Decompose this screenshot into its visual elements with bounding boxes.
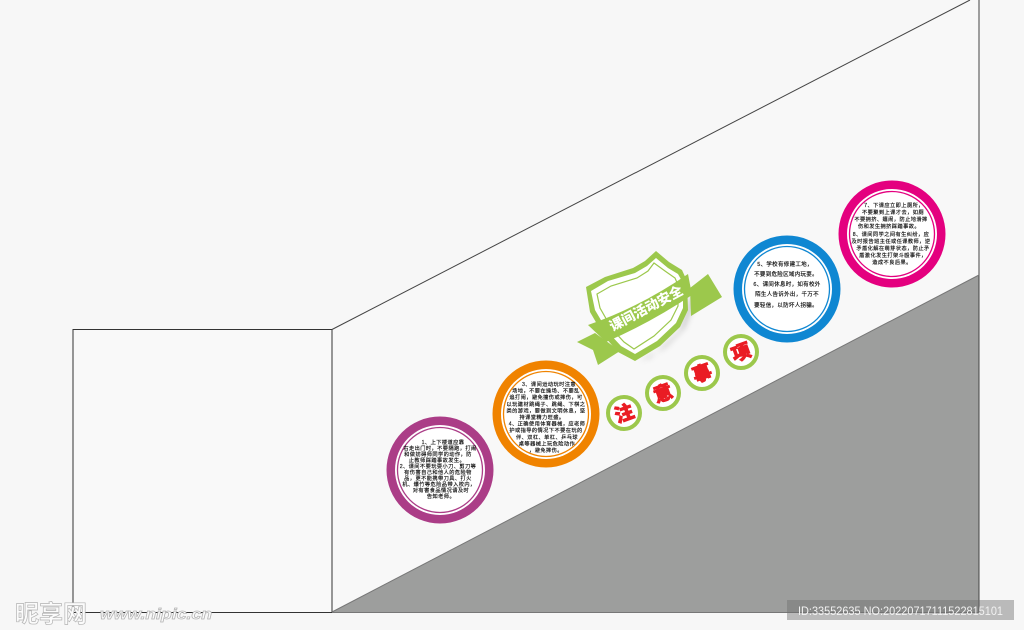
shield outer — [586, 251, 688, 361]
circle: orange notice: ，避免摔伤。 — [529, 446, 563, 454]
circle: pink notice: 伤和发生拥挤踩踏事故。 — [858, 222, 920, 230]
circle: blue notice: 不要到危险区域内玩耍。 — [754, 270, 818, 278]
circle: 项: 项 — [729, 339, 754, 367]
floor shadow area — [332, 275, 979, 612]
circle: purple notice: 有伤害自己和他人的危险物 — [404, 468, 472, 476]
circle: orange notice: 4、正确使用体育器械，应老师 — [509, 420, 585, 428]
circle: pink notice: 盾激化发生打架斗殴事件， — [859, 251, 927, 259]
circle: orange notice: 追打闹，避免撞伤或摔伤，可 — [509, 393, 583, 401]
circle: orange notice: 持课堂精力旺盛。 — [519, 413, 565, 421]
circle: pink notice: 矛盾化解在萌芽状态，防止矛 — [856, 244, 930, 252]
ribbon title: 课间活动安全 — [606, 282, 686, 334]
watermark: site logo: 昵享网 — [15, 601, 87, 628]
circle: blue notice: 5、学校有修建工地， — [757, 260, 813, 268]
circle: orange notice: 3、课间运动玩时注意 — [522, 380, 576, 388]
circle: purple notice: 1、上下楼道应靠 — [422, 438, 464, 446]
circle: pink notice: 及时报告班主任或任课教师，逆 — [852, 237, 930, 245]
circle: orange notice: 桌等器械上玩危险动作 — [519, 439, 575, 447]
circle: orange notice: 场地，不要在操场、不要乱 — [512, 387, 580, 395]
circle: orange notice: 类的游戏，要做到文明休息，坚 — [507, 406, 585, 414]
shield shadow — [640, 290, 694, 360]
circle: orange notice — [492, 360, 600, 468]
circle: blue notice: 6、课间休息时，如有校外 — [753, 280, 821, 288]
shield white — [591, 258, 683, 354]
circle: orange notice: 伴、双杠、单杠、乒乓球 — [516, 433, 578, 441]
watermark: id bar: ID:33552635 NO:20220717111522815101 — [798, 604, 1003, 618]
circle: purple notice: 机、爆竹等危险品带入校内， — [402, 480, 476, 488]
circle: purple notice: 对有害食品情况请及时 — [413, 486, 469, 494]
left box — [73, 330, 332, 612]
circle: blue notice: 陌生人告诉外出，千万不 — [755, 290, 819, 298]
circle: purple notice: 和做妨碍师同学的动作，防 — [404, 450, 472, 458]
circle: 项 — [725, 336, 757, 368]
ribbon right tail — [690, 274, 722, 316]
circle: purple notice: 2、课间不要玩耍小刀、剪刀等 — [400, 462, 476, 470]
circle: 事 — [686, 357, 718, 389]
wall outline — [332, 0, 979, 612]
circle: pink notice: 造成不良后果。 — [872, 258, 912, 266]
circle: purple notice: 止教师踩踏事故发生。 — [409, 456, 465, 464]
circle: purple notice — [386, 416, 494, 524]
shield inner line — [597, 263, 678, 349]
circle: 注 — [608, 397, 640, 429]
watermark: id bar — [787, 600, 1014, 620]
watermark: site logo — [15, 601, 212, 628]
circle: purple notice: 品，更不能携带刀具、打火 — [404, 474, 472, 482]
circle: purple notice: 右走出门时，不要隔跑，打闹 — [403, 444, 477, 452]
circle: 事: 事 — [689, 359, 715, 388]
ribbon left tail — [577, 333, 620, 365]
circle: 意 — [647, 377, 679, 409]
circle: orange notice: 护或指导的情况下不要在玩的 — [509, 426, 583, 434]
circle: pink notice: 不要拥挤、嬉闹，防止地滑摔 — [854, 215, 928, 223]
circle: orange notice: 以玩建材跳绳子、跳绳、下棋之 — [507, 400, 585, 408]
wall panel — [332, 0, 979, 612]
circle: pink notice: 不要聚到上课才去，如厕 — [862, 208, 924, 216]
watermark: site logo: www.nipic.cn — [100, 606, 212, 623]
circle: blue notice — [734, 236, 840, 342]
circle: pink notice: 7、下课应立即上厕所， — [864, 201, 924, 209]
ribbon band — [588, 274, 692, 342]
circle: purple notice: 告知老师。 — [427, 492, 455, 500]
circle: pink notice — [838, 180, 946, 288]
circle: 注: 注 — [611, 399, 637, 428]
badge: shield and ribbon — [577, 251, 722, 365]
circle: pink notice: 8、课间同学之间有生纠纷，应 — [853, 230, 929, 238]
circle: blue notice: 要轻信，以防坏人拐骗。 — [754, 301, 818, 309]
circle: 意: 意 — [650, 379, 676, 408]
